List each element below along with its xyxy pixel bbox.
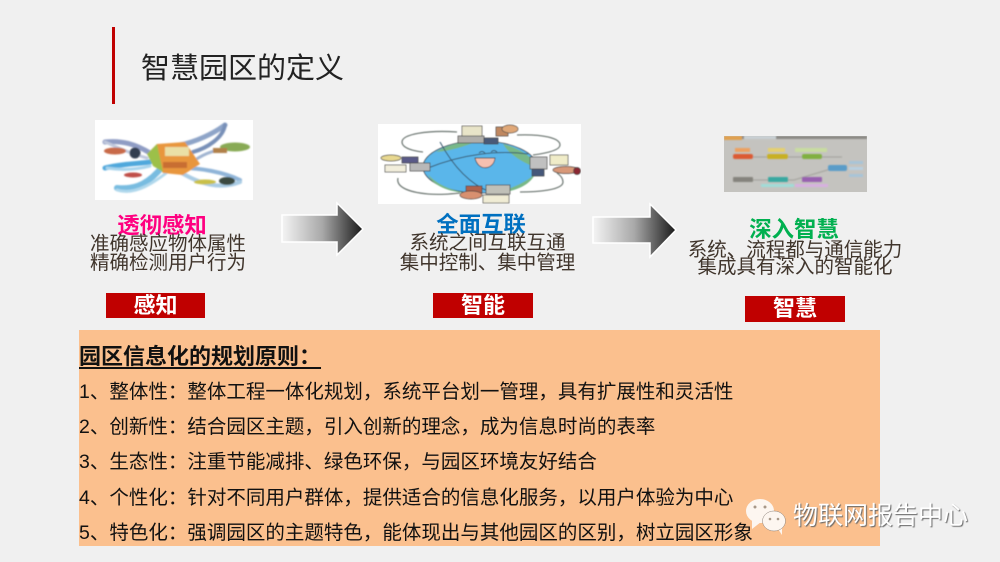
- text: sensing description: 精确检测用户行为: [90, 252, 246, 274]
- watermark text: 物联网报告中心: [793, 502, 968, 530]
- list item 5: 5、特色化：强调园区的主题特色，能体现出与其他园区的区别，树立园区形象: [79, 522, 753, 544]
- label: wisdom: [745, 296, 845, 322]
- list item 1: 1、整体性：整体工程一体化规划，系统平台划一管理，具有扩展性和灵活性: [79, 381, 733, 403]
- list item 4: 4、个性化：针对不同用户群体，提供适合的信息化服务，以用户体验为中心: [79, 487, 733, 509]
- list item 2: 2、创新性：结合园区主题，引入创新的理念，成为信息时尚的表率: [79, 416, 655, 438]
- text: sensing description: [90, 233, 246, 274]
- text: deep intelligence description: 集成具有深入的智能化: [697, 256, 892, 278]
- image: sensing illustration: [95, 120, 253, 200]
- text: deep intelligence description: [688, 239, 902, 278]
- title: 智慧园区的定义: [141, 53, 344, 85]
- label: sensing: 感知: [133, 293, 178, 318]
- heading: thorough sensing: 透彻感知: [117, 213, 207, 238]
- text: interconnect description: 集中控制、集中管理: [400, 252, 575, 274]
- text: interconnect description: 系统之间互联互通: [409, 232, 566, 254]
- heading: planning principles: 园区信息化的规划原则：: [79, 344, 321, 369]
- label: intelligent: [433, 293, 533, 318]
- icon: wechat logo: [746, 499, 786, 535]
- text: sensing description: 准确感应物体属性: [90, 233, 246, 255]
- title accent bar: [112, 27, 115, 104]
- label: intelligent: 智能: [461, 293, 505, 318]
- text: interconnect description: [400, 232, 575, 274]
- label: sensing: [106, 293, 205, 318]
- heading: deep intelligence: 深入智慧: [749, 217, 839, 242]
- list item 3: 3、生态性：注重节能减排、绿色环保，与园区环境友好结合: [79, 451, 597, 473]
- label: wisdom: 智慧: [773, 296, 817, 321]
- arrow: interconnect to deep intelligence: [592, 203, 677, 258]
- image: connected globe illustration: [378, 124, 581, 204]
- image: process flow screenshot: [724, 136, 867, 192]
- arrow: sensing to interconnect: [282, 202, 364, 256]
- panel: planning principles: [79, 330, 880, 546]
- text: deep intelligence description: 系统、流程都与通信能力: [688, 239, 902, 261]
- heading: full interconnect: 全面互联: [436, 212, 526, 237]
